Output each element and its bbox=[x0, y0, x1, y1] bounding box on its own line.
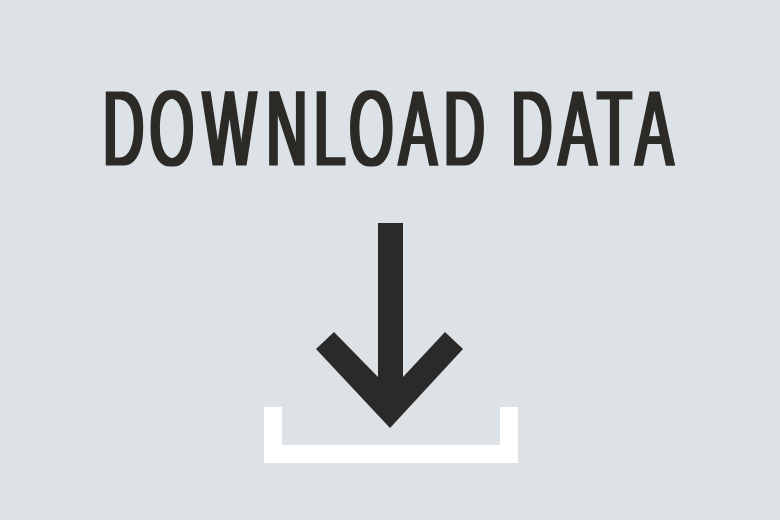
icon: download tray bbox=[264, 407, 518, 463]
icon: download arrow bbox=[316, 223, 463, 428]
title: DOWNLOAD DATA bbox=[103, 69, 674, 189]
